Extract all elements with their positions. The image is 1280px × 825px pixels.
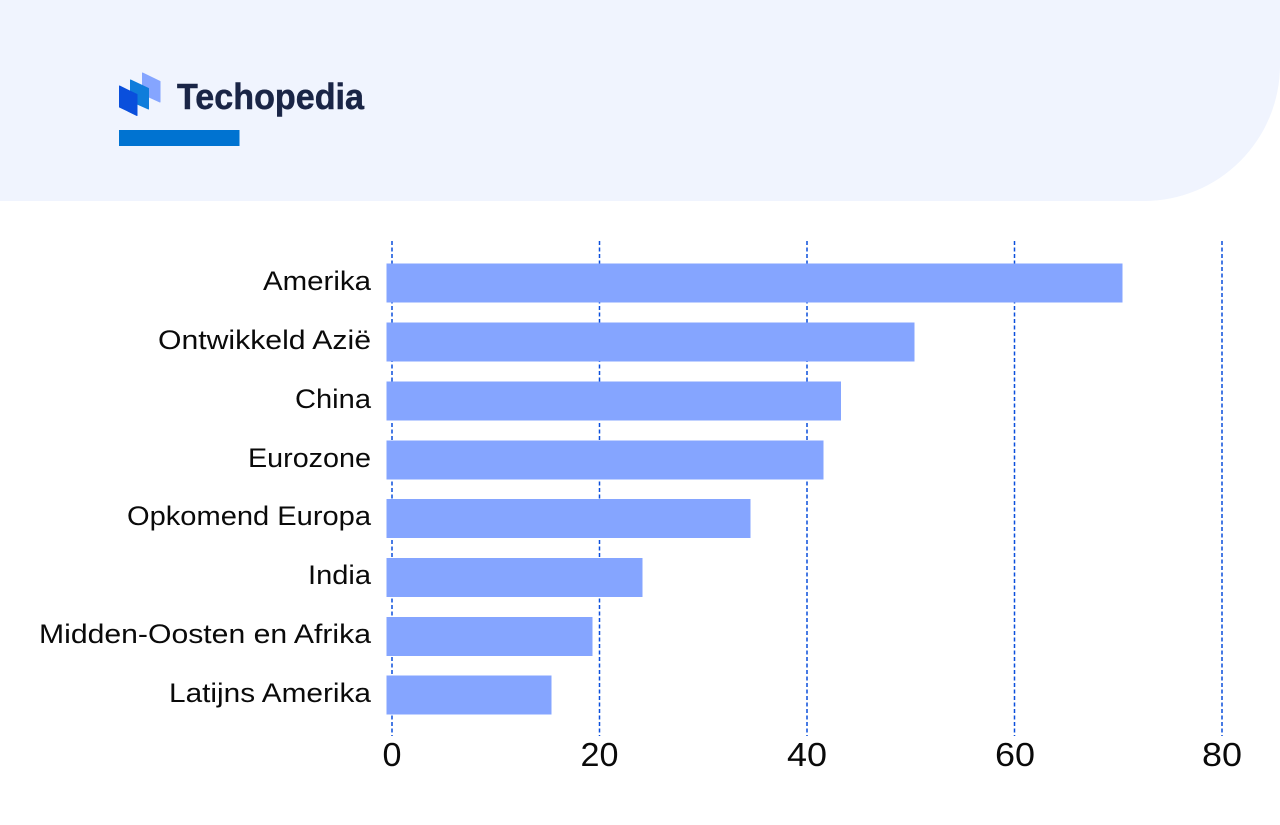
category labels: Eurozone — [248, 443, 371, 473]
category labels — [39, 266, 372, 708]
axis labels: 60 — [995, 736, 1035, 773]
header panel — [0, 0, 1280, 201]
grid lines — [392, 241, 1222, 736]
category labels: China — [295, 384, 372, 414]
bars — [386, 264, 1122, 714]
category labels: Midden-Oosten en Afrika — [39, 619, 372, 649]
accent bar — [119, 130, 240, 146]
category labels: Amerika — [263, 266, 372, 296]
axis labels — [382, 736, 1242, 773]
axis labels: 0 — [382, 736, 402, 773]
logo — [120, 73, 365, 117]
logo wordmark: Techopedia — [177, 76, 365, 117]
axis labels: 80 — [1202, 736, 1242, 773]
axis labels: 40 — [787, 736, 827, 773]
bar chart — [39, 241, 1242, 773]
category labels: India — [308, 560, 372, 590]
axis labels: 20 — [580, 736, 618, 773]
category labels: Opkomend Europa — [127, 501, 372, 531]
category labels: Ontwikkeld Azië — [158, 325, 371, 355]
icon: logo layers — [120, 73, 160, 116]
category labels: Latijns Amerika — [169, 678, 372, 708]
